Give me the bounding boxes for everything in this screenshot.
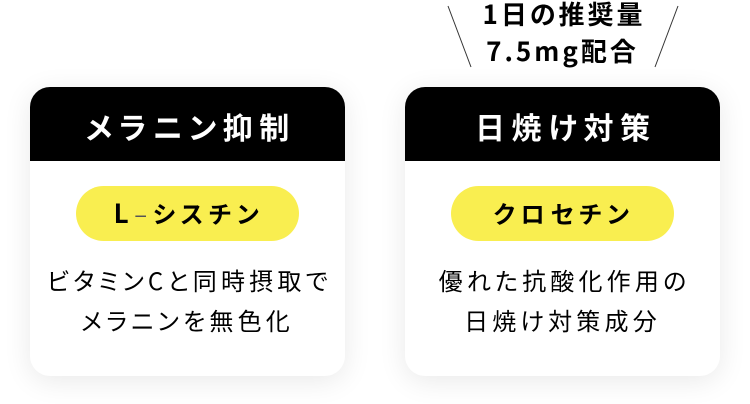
pill: L-cystine <box>76 186 299 241</box>
pill: crocetin <box>451 186 674 241</box>
text block: L-cystine description <box>47 262 332 337</box>
callout: daily recommended amount: 7.5mg配合 <box>486 32 639 69</box>
heading: sunburn protection: 日焼け対策 <box>475 104 656 148</box>
heading: melanin suppression <box>30 87 345 161</box>
panel: sunburn protection <box>405 87 720 376</box>
panel: melanin suppression <box>30 87 345 376</box>
text block: L-cystine description: メラニンを無色化 <box>81 302 294 337</box>
callout accent lines <box>448 6 678 68</box>
text block: crocetin description: 日焼け対策成分 <box>464 302 661 337</box>
text block: crocetin description <box>439 262 690 337</box>
heading: sunburn protection <box>405 87 720 161</box>
pill: crocetin: クロセチン <box>493 195 635 230</box>
text block: L-cystine description: ビタミンCと同時摂取で <box>47 262 332 297</box>
text block: crocetin description: 優れた抗酸化作用の <box>439 262 690 297</box>
callout: daily recommended amount <box>482 0 645 69</box>
heading: melanin suppression: メラニン抑制 <box>86 104 296 148</box>
pill: L-cystine: L–シスチン <box>114 194 264 231</box>
